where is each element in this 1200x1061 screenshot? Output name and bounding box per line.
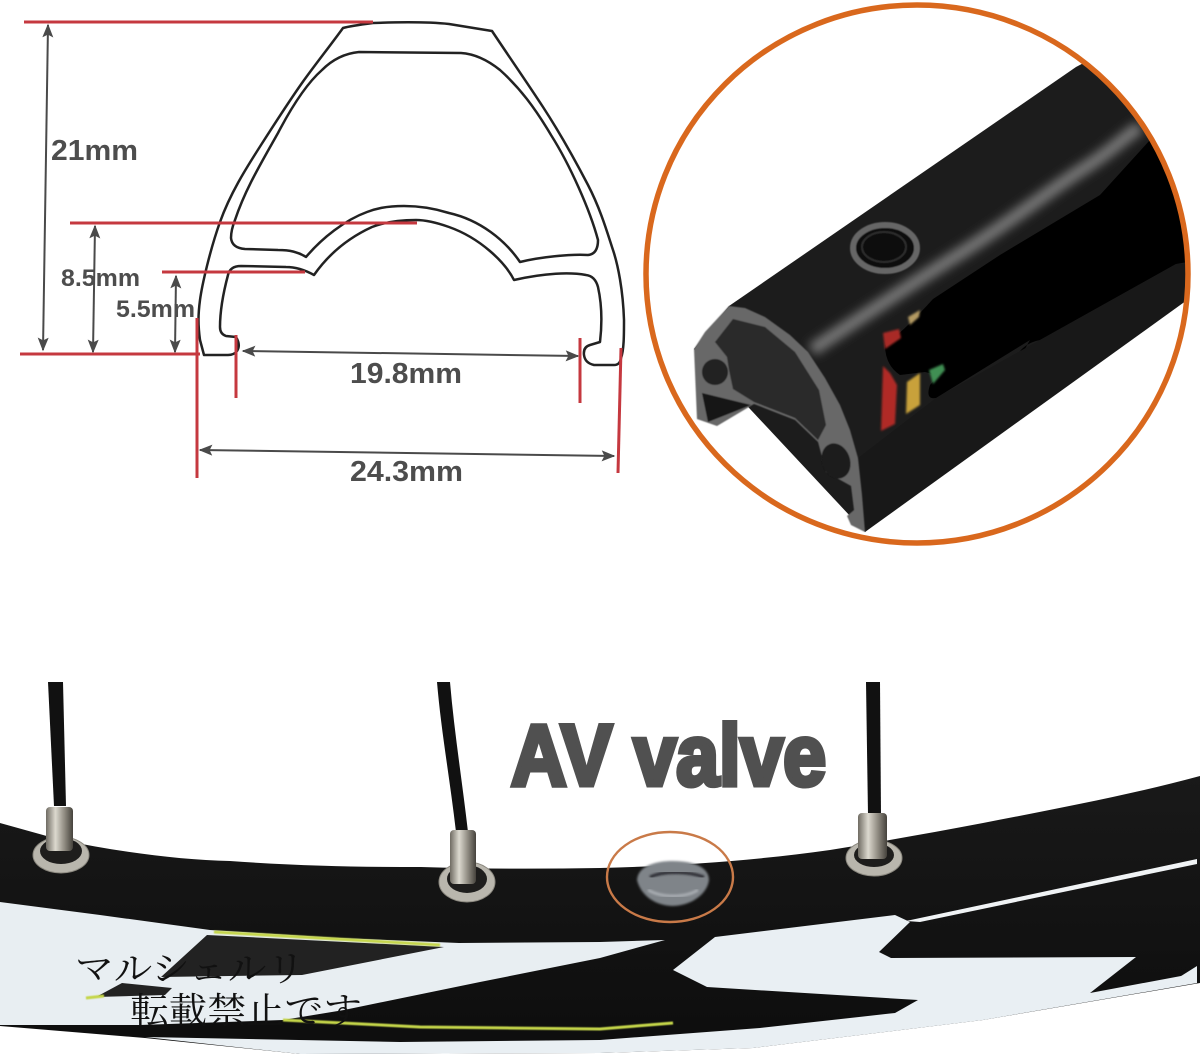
black overlay area (885, 141, 1185, 398)
lower rim wall (858, 262, 1200, 532)
outer rim profile outline (198, 22, 624, 365)
dark decal pieces (96, 935, 444, 997)
rim body photo (693, 64, 1186, 532)
rim cross-section diagram (20, 22, 624, 488)
watermark line 2: 転載禁止です (130, 991, 362, 1031)
spokes (48, 682, 881, 832)
thin white stripe (906, 859, 1197, 922)
label: 21mm: 21mm (51, 135, 138, 167)
yellow accent lines (86, 932, 673, 1029)
label: 8.5mm: 8.5mm (61, 265, 140, 292)
watermark line 1: マルシェルリ (75, 949, 305, 989)
label: 19.8mm: 19.8mm (350, 358, 462, 390)
nipple: left (33, 807, 89, 873)
circular rim close-up (646, 0, 1200, 543)
label: 5.5mm: 5.5mm (116, 296, 195, 323)
heading: AV valve: AV valve (511, 708, 826, 804)
white S decal and lower strip (145, 915, 1197, 1054)
watermark text (75, 949, 362, 1031)
dimension arrows (43, 25, 614, 456)
orange ellipse highlight (607, 832, 733, 922)
black rim band (0, 776, 1200, 1054)
orange circle frame (646, 5, 1188, 543)
AV valve hole (637, 861, 709, 906)
valve hole (853, 225, 917, 271)
wheel rim photo (0, 682, 1200, 1054)
inner chamber outline (231, 52, 598, 262)
colour stripes (881, 310, 945, 431)
small white wedge (1170, 966, 1197, 983)
white decal left (0, 902, 665, 1025)
nipple: right (846, 813, 902, 876)
red reference lines (20, 22, 621, 478)
highlight band (812, 127, 1140, 350)
end-section face (694, 306, 865, 532)
label: 24.3mm: 24.3mm (350, 456, 463, 488)
nipple: centre (439, 830, 495, 902)
